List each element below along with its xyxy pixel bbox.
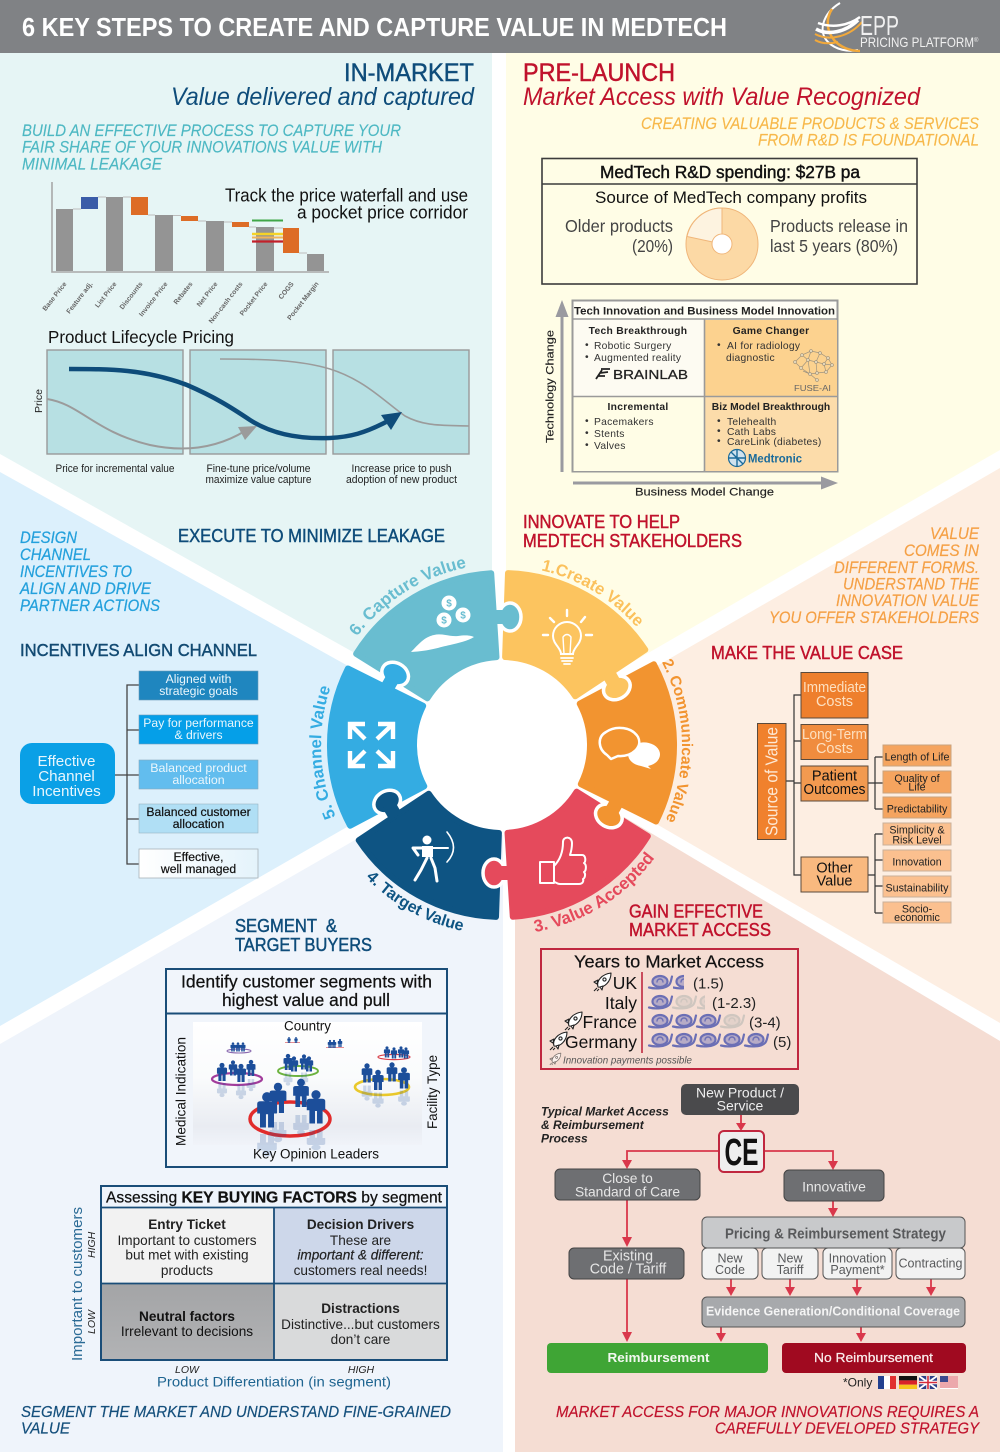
node: close to standard of care xyxy=(555,1169,700,1200)
chart: product lifecycle: maximize value capture xyxy=(206,474,312,486)
chart: product lifecycle: Increase price to push xyxy=(352,463,452,475)
heading: execute to minimize leakage: EXECUTE TO MINIMIZE LEAKAGE xyxy=(178,526,445,546)
node: source of value xyxy=(758,724,786,840)
icon: brain network xyxy=(794,350,833,381)
flag: Germany xyxy=(899,1376,917,1389)
node: aligned with strategic goals: strategic goals xyxy=(159,684,238,698)
node: close to standard of care: Standard of Care xyxy=(575,1184,680,1200)
axis: technology change xyxy=(544,300,568,472)
callout: value comes in different forms: COMES IN xyxy=(904,542,979,560)
cell: decision drivers: important & different: xyxy=(297,1248,424,1262)
chart: price waterfall: Feature adj. xyxy=(66,281,95,315)
heading: innovate to help stakeholders: INNOVATE TO HELP xyxy=(523,512,680,532)
flag: United Kingdom xyxy=(919,1376,937,1389)
cell: distractions: Distinctive...but customers xyxy=(281,1317,440,1332)
chart: price waterfall: Discounts xyxy=(119,281,145,311)
callout: design channel incentives: INCENTIVES TO xyxy=(20,563,132,581)
node: existing code / tariff xyxy=(569,1248,684,1279)
node: new tariff: Tariff xyxy=(777,1263,804,1277)
node: new code: Code xyxy=(715,1263,745,1277)
arrows and connectors xyxy=(627,1115,931,1335)
heading: in-market: IN-MARKET xyxy=(344,59,474,87)
node: new code xyxy=(702,1248,758,1279)
panel: R&D spending and profit sources: (20%) xyxy=(632,236,673,256)
panel: R&D spending and profit sources: Products release in xyxy=(770,216,908,236)
cell: decision drivers xyxy=(294,1217,427,1278)
text: track the price waterfall: Track the price waterfall and use xyxy=(225,186,468,206)
cell: incremental: • xyxy=(585,416,589,427)
node: balanced product allocation xyxy=(139,760,258,789)
logo: EPP Pricing Platform xyxy=(815,3,979,51)
heading: segment and target buyers xyxy=(235,916,372,955)
callout: design channel incentives xyxy=(19,529,160,615)
chart: product lifecycle: Price for incremental value xyxy=(56,463,175,475)
leaf nodes: other value: Socio- xyxy=(902,904,933,916)
node: pricing and reimbursement strategy xyxy=(702,1217,965,1248)
node: balanced product allocation: allocation xyxy=(172,773,225,787)
callout: build an effective process: MINIMAL LEAKAGE xyxy=(22,156,163,174)
icon: coins and hand: $ xyxy=(460,610,466,622)
callout: value comes in different forms: UNDERSTAND THE xyxy=(843,576,980,594)
node: aligned with strategic goals: Aligned with xyxy=(166,672,231,686)
callout: build an effective process: FAIR SHARE OF YOUR INNOVATIONS VALUE WITH xyxy=(22,138,382,156)
callout: build an effective process xyxy=(22,122,401,174)
axis label: important to customers: Important to customers xyxy=(69,1207,86,1361)
panel: identify customer segments: Country xyxy=(284,1018,331,1034)
node: evidence generation: Evidence Generation/Conditional Coverage xyxy=(706,1304,960,1318)
matrix: key buying factors: Assessing KEY BUYING FACTORS by segment xyxy=(106,1190,443,1206)
node: existing code / tariff: Code / Tariff xyxy=(590,1262,666,1278)
logo: medtronic: Medtronic xyxy=(748,452,802,466)
cell: tech breakthrough: Tech Breakthrough xyxy=(589,326,687,337)
cell: neutral factors: Neutral factors xyxy=(139,1309,235,1324)
node: new code: New xyxy=(717,1252,743,1266)
heading: innovate to help stakeholders xyxy=(523,512,742,551)
cell: biz model breakthrough: Telehealth xyxy=(727,417,776,428)
panel: years to market access: (1.5) xyxy=(693,976,724,992)
node: contracting xyxy=(896,1248,965,1279)
logo: EPP Pricing Platform: ® xyxy=(974,37,979,44)
heading: segment and target buyers: TARGET BUYERS xyxy=(235,935,372,955)
cell: incremental: Incremental xyxy=(607,402,669,413)
cell: tech breakthrough: Robotic Surgery xyxy=(594,341,672,352)
cell: neutral factors xyxy=(121,1309,253,1339)
chart: price waterfall: Invoice Price xyxy=(138,281,170,318)
panel: years to market access: UK xyxy=(613,973,637,993)
cell: tech breakthrough: Augmented reality xyxy=(594,353,682,364)
text: track the price waterfall: a pocket price corridor xyxy=(297,202,468,222)
leaf nodes: patient outcomes: Life xyxy=(908,782,926,794)
leaf nodes: patient outcomes: Quality of xyxy=(894,773,940,785)
node: innovative: Innovative xyxy=(802,1178,866,1194)
node: contracting: Contracting xyxy=(899,1256,963,1270)
node: new product / service: New Product / xyxy=(696,1084,784,1100)
node: innovation payment xyxy=(823,1248,892,1279)
heading: pre-launch: PRE-LAUNCH xyxy=(523,59,675,87)
chart: price waterfall: Non-cash costs xyxy=(208,281,245,325)
callout: segment the market: SEGMENT THE MARKET AND UNDERSTAND FINE-GRAINED xyxy=(21,1404,451,1421)
chart: price waterfall: List Price xyxy=(94,281,119,309)
panel: years to market access: France xyxy=(583,1012,637,1032)
leaf nodes: other value: Innovation xyxy=(892,856,942,868)
axis label: important to customers xyxy=(69,1207,98,1361)
chart: price waterfall: COGS xyxy=(278,281,296,301)
matrix: tech and business model innovation: Tech Innovation and Business Model Innovation xyxy=(574,306,835,318)
piece 2: communicate value xyxy=(546,662,723,845)
node: patient outcomes: Outcomes xyxy=(804,782,866,798)
matrix: tech and business model innovation xyxy=(572,300,838,472)
pie chart: 80/20 profit split xyxy=(686,208,758,280)
cell: entry ticket: Important to customers xyxy=(117,1233,257,1248)
text: typical market access process xyxy=(541,1104,669,1146)
node: other value xyxy=(801,857,868,892)
icon: archer xyxy=(413,832,454,881)
header banner xyxy=(0,0,1000,53)
leaf nodes: patient outcomes: Length of Life xyxy=(885,752,949,764)
root node xyxy=(20,743,115,804)
matrix: key buying factors xyxy=(69,1186,447,1390)
icon: coins and hand: $ xyxy=(446,598,452,610)
callout: value comes in different forms: YOU OFFER STAKEHOLDERS xyxy=(769,609,979,627)
icon: expanding arrows xyxy=(350,724,393,766)
cell: game changer: FUSE-AI xyxy=(794,383,831,393)
heading: make the value case: MAKE THE VALUE CASE xyxy=(711,643,903,663)
puzzle ring xyxy=(309,559,694,932)
text: typical market access process: Typical Market Access xyxy=(541,1104,669,1118)
node: balanced product allocation: Balanced product xyxy=(150,761,247,775)
node: other value: Value xyxy=(816,874,853,890)
callout: design channel incentives: DESIGN xyxy=(20,529,77,547)
heading: gain effective market access: GAIN EFFECTIVE xyxy=(629,902,763,922)
chart: price waterfall: Pocket Price xyxy=(239,281,270,317)
node: balanced customer allocation xyxy=(139,804,258,833)
callout: market access for major innovations xyxy=(556,1404,980,1438)
node: other value: Other xyxy=(816,860,853,876)
root node: Channel xyxy=(38,768,95,785)
cell: biz model breakthrough: • xyxy=(717,436,721,447)
node: balanced customer allocation: Balanced customer xyxy=(146,805,251,819)
cell: biz model breakthrough: • xyxy=(717,426,721,437)
heading: in-market xyxy=(171,59,475,111)
callout: creating valuable products: FROM R&D IS FOUNDATIONAL xyxy=(758,132,979,150)
panel: identify customer segments: Identify customer segments with xyxy=(181,972,432,992)
customer group rings and people xyxy=(212,1037,410,1156)
panel: identify customer segments: highest value and pull xyxy=(222,990,390,1010)
chart: price waterfall: Net Price xyxy=(196,281,220,308)
heading: product lifecycle pricing: Product Lifecycle Pricing xyxy=(48,327,234,347)
cell: distractions: Distractions xyxy=(321,1301,400,1316)
callout: design channel incentives: PARTNER ACTIONS xyxy=(20,597,160,615)
cell: tech breakthrough: • xyxy=(585,352,589,363)
ring labels: 3. Value Accepted xyxy=(534,851,654,932)
cell: incremental: • xyxy=(585,440,589,451)
node: no reimbursement: No Reimbursement xyxy=(814,1350,933,1365)
leaf nodes: other value xyxy=(883,823,951,924)
logo: EPP Pricing Platform: EPP xyxy=(860,10,899,41)
cell: game changer: • xyxy=(717,340,721,351)
node: existing code / tariff: Existing xyxy=(603,1248,653,1264)
text: typical market access process: Process xyxy=(541,1132,588,1146)
panel: R&D spending and profit sources: last 5 years (80%) xyxy=(770,236,898,256)
panel: identify customer segments: Key Opinion Leaders xyxy=(253,1146,379,1162)
callout: build an effective process: BUILD AN EFFECTIVE PROCESS TO CAPTURE YOUR xyxy=(22,122,401,140)
root node: Incentives xyxy=(32,783,101,800)
cell: game changer: AI for radiology xyxy=(727,341,801,352)
icon: thumbs up xyxy=(540,838,586,884)
cell: entry ticket: products xyxy=(161,1263,213,1278)
chart: price waterfall: Base Price xyxy=(42,281,69,313)
leaf nodes: patient outcomes: Predictability xyxy=(887,804,948,816)
ring labels: 5. Channel Value xyxy=(309,686,335,820)
chart: product lifecycle: Fine-tune price/volume xyxy=(206,463,311,475)
callout: value comes in different forms: DIFFERENT FORMS. xyxy=(834,559,979,577)
panel: R&D spending and profit sources xyxy=(542,158,917,284)
ring labels xyxy=(309,559,694,932)
piece 4: target value xyxy=(359,794,499,917)
cell: incremental: Stents xyxy=(594,429,625,440)
node: new product / service xyxy=(681,1084,799,1115)
node: innovation payment: Innovation xyxy=(829,1252,886,1266)
node: innovation payment: Payment* xyxy=(830,1263,885,1277)
icon: coins and hand: $ xyxy=(441,616,447,626)
cell: incremental xyxy=(585,402,669,452)
cell: game changer: diagnostic xyxy=(726,353,775,364)
cell: neutral factors: Irrelevant to decisions xyxy=(121,1324,253,1339)
callout: segment the market: VALUE xyxy=(21,1420,70,1438)
node: balanced customer allocation: allocation xyxy=(173,817,224,831)
tree: source of value xyxy=(758,672,951,924)
node: source of value: Source of Value xyxy=(762,727,782,836)
node: effective well managed: Effective, xyxy=(174,850,223,864)
node: patient outcomes: Patient xyxy=(812,768,857,784)
tree: effective channel incentives xyxy=(20,671,258,878)
panel: years to market access xyxy=(541,949,798,1069)
logo: EPP Pricing Platform: PRICING PLATFORM xyxy=(860,34,974,50)
chart: product lifecycle: adoption of new product xyxy=(346,474,457,486)
ring labels: 6. Capture Value xyxy=(350,559,466,634)
chart: price waterfall: Rebates xyxy=(173,281,195,306)
panel: R&D spending and profit sources: MedTech R&D spending: $27B pa xyxy=(600,162,860,182)
flowchart: market access and reimbursement xyxy=(547,1084,966,1373)
node: effective well managed: well managed xyxy=(160,862,236,876)
axis label: important to customers: LOW xyxy=(86,1309,98,1334)
piece 6: capture value xyxy=(355,535,531,718)
cell: tech breakthrough xyxy=(585,326,688,382)
node: long-term costs xyxy=(801,724,868,760)
panel: years to market access: Years to Market Access xyxy=(574,952,764,972)
axis: technology change: Technology Change xyxy=(544,330,556,443)
cell: incremental: Pacemakers xyxy=(594,417,654,428)
cell: entry ticket xyxy=(117,1217,257,1278)
node: close to standard of care: Close to xyxy=(602,1171,653,1186)
heading: pre-launch xyxy=(523,59,921,111)
cell: decision drivers: These are xyxy=(330,1233,391,1248)
axis label: product differentiation: HIGH xyxy=(348,1364,375,1376)
chart: product lifecycle: Price xyxy=(33,389,45,413)
callout: value comes in different forms xyxy=(769,525,980,627)
chart: price waterfall xyxy=(42,182,329,325)
node: patient outcomes xyxy=(801,766,868,801)
cell: biz model breakthrough: • xyxy=(717,416,721,427)
cell: tech breakthrough: • xyxy=(585,340,589,351)
node: pay for performance xyxy=(139,715,258,744)
cell: game changer xyxy=(717,326,833,393)
node: pay for performance: Pay for performance xyxy=(143,716,254,730)
cell: distractions: don’t care xyxy=(331,1332,390,1347)
icon: CE mark: CE xyxy=(724,1132,758,1174)
callout: creating valuable products xyxy=(641,115,979,150)
panel: identify customer segments: Facility Type xyxy=(425,1055,440,1129)
cell: distractions xyxy=(281,1301,440,1347)
chart: product lifecycle xyxy=(33,350,469,486)
leaf nodes: patient outcomes xyxy=(883,745,951,818)
ring labels: 2. Communicate Value xyxy=(662,659,694,822)
cell: biz model breakthrough xyxy=(712,402,830,466)
node: immediate costs xyxy=(801,672,868,718)
piece 3: value accepted xyxy=(473,772,649,955)
node: new product / service: Service xyxy=(717,1098,764,1114)
node: evidence generation xyxy=(702,1297,965,1327)
icons: innovation rockets xyxy=(550,973,611,1065)
callout: design channel incentives: ALIGN AND DRIVE xyxy=(19,580,152,598)
node: pay for performance: & drivers xyxy=(174,728,223,742)
node: innovative xyxy=(784,1170,884,1201)
leaf nodes: other value: Risk Level xyxy=(892,834,942,846)
icon: CE mark xyxy=(719,1131,764,1174)
icon: coins and hand xyxy=(411,596,474,652)
flag: United States xyxy=(940,1376,958,1389)
panel: R&D spending and profit sources: Source of MedTech company profits xyxy=(595,188,867,207)
cell: tech breakthrough: BRAINLAB xyxy=(613,367,688,382)
cell: biz model breakthrough: Biz Model Breakthrough xyxy=(712,402,830,413)
callout: market access for major innovations: CAREFULLY DEVELOPED STRATEGY xyxy=(715,1420,980,1438)
axis: business model change: Business Model Change xyxy=(635,486,774,498)
flag: France xyxy=(878,1376,896,1389)
text: track the price waterfall xyxy=(225,186,468,222)
panel: years to market access: Innovation payments possible xyxy=(563,1056,692,1066)
puzzle knobs xyxy=(370,603,634,887)
node: no reimbursement xyxy=(782,1343,966,1373)
callout: market access for major innovations: MARKET ACCESS FOR MAJOR INNOVATIONS REQUIRES A xyxy=(556,1404,979,1421)
axis label: product differentiation: Product Differentiation (in segment) xyxy=(157,1374,391,1390)
node: reimbursement xyxy=(547,1343,768,1373)
ring labels: 1.Create Value xyxy=(542,560,642,626)
root node: Effective xyxy=(38,753,95,770)
icons: snails xyxy=(649,976,768,1046)
leaf nodes: other value: Sustainability xyxy=(886,882,949,894)
callout: design channel incentives: CHANNEL xyxy=(20,546,91,564)
panel: years to market access: Italy xyxy=(605,993,637,1013)
heading: segment and target buyers: SEGMENT & xyxy=(235,916,337,936)
heading: gain effective market access xyxy=(629,902,771,940)
piece 5: channel value xyxy=(281,645,458,828)
cell: incremental: Valves xyxy=(594,441,626,452)
node: new tariff xyxy=(762,1248,818,1279)
node: new tariff: New xyxy=(777,1252,803,1266)
panel: years to market access: (1-2.3) xyxy=(712,995,756,1012)
axis: business model change xyxy=(573,476,838,498)
heading: pre-launch: Market Access with Value Recognized xyxy=(523,83,921,111)
node: immediate costs: Immediate xyxy=(803,680,866,696)
panel: years to market access: (5) xyxy=(773,1034,791,1051)
icon: speech bubbles xyxy=(600,728,660,769)
cell: biz model breakthrough: Cath Labs xyxy=(727,427,776,438)
legend: only flags: *Only xyxy=(843,1376,872,1390)
axis label: product differentiation xyxy=(157,1364,391,1390)
leaf nodes: other value: Simplicity & xyxy=(889,824,945,836)
node: pricing and reimbursement strategy: Pricing & Reimbursement Strategy xyxy=(725,1226,946,1242)
icon: lightbulb xyxy=(543,610,592,664)
node: aligned with strategic goals xyxy=(139,671,258,700)
node: long-term costs: Costs xyxy=(816,741,853,757)
text: typical market access process: & Reimbursement xyxy=(541,1118,645,1132)
callout: value comes in different forms: VALUE xyxy=(930,525,980,543)
cell: entry ticket: but met with existing xyxy=(125,1248,249,1262)
panel: identify customer segments xyxy=(166,969,447,1167)
node: effective well managed xyxy=(139,849,258,878)
piece 1: create value xyxy=(505,573,645,696)
node: reimbursement: Reimbursement xyxy=(608,1350,710,1365)
panel: years to market access: Germany xyxy=(565,1032,637,1052)
axis label: product differentiation: LOW xyxy=(175,1364,200,1376)
title: 6 KEY STEPS TO CREATE AND CAPTURE VALUE IN MEDTECH xyxy=(22,14,727,42)
axis label: important to customers: HIGH xyxy=(86,1231,98,1258)
chart: price waterfall: Pocket Margin xyxy=(286,281,321,322)
callout: value comes in different forms: INNOVATION VALUE xyxy=(836,592,980,610)
node: immediate costs: Costs xyxy=(816,694,853,710)
callout: segment the market xyxy=(21,1404,451,1438)
cell: entry ticket: Entry Ticket xyxy=(148,1217,226,1232)
heading: gain effective market access: MARKET ACCESS xyxy=(629,920,771,940)
heading: innovate to help stakeholders: MEDTECH STAKEHOLDERS xyxy=(523,531,742,551)
cell: decision drivers: customers real needs! xyxy=(294,1263,427,1278)
cell: biz model breakthrough: CareLink (diabetes) xyxy=(727,437,822,448)
panel: identify customer segments: Medical Indication xyxy=(174,1037,188,1146)
cell: game changer: Game Changer xyxy=(733,326,809,337)
legend: only flags xyxy=(843,1376,958,1390)
heading: incentives align channel: INCENTIVES ALIGN CHANNEL xyxy=(20,640,257,660)
leaf nodes: other value: economic xyxy=(894,912,941,924)
panel: R&D spending and profit sources: Older products xyxy=(565,216,673,236)
heading: in-market: Value delivered and captured xyxy=(171,83,475,111)
panel: years to market access: (3-4) xyxy=(749,1014,781,1032)
ring labels: 4. Target Value xyxy=(368,873,463,930)
cell: decision drivers: Decision Drivers xyxy=(307,1217,414,1232)
cell: incremental: • xyxy=(585,428,589,439)
node: long-term costs: Long-Term xyxy=(802,727,867,743)
